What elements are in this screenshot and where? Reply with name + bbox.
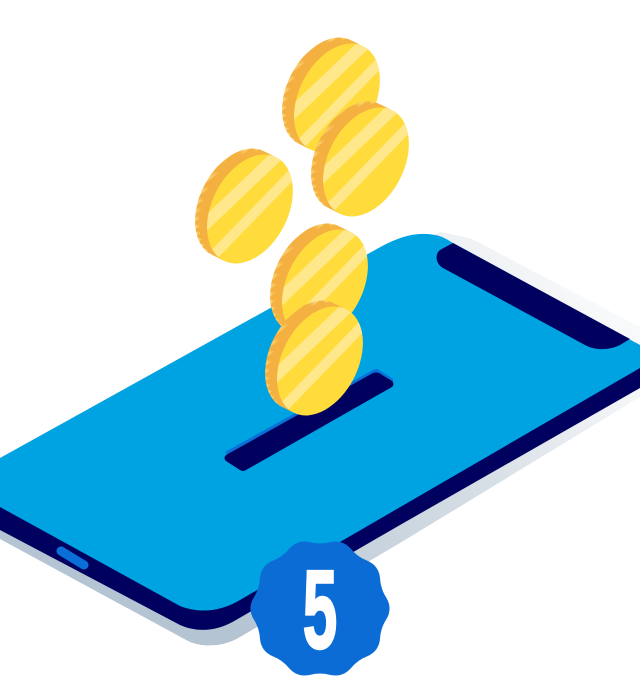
coin: left — [178, 134, 310, 278]
coin: top — [265, 23, 397, 167]
slot highlight — [225, 369, 393, 465]
phone screen — [0, 234, 640, 611]
phone home button — [61, 551, 84, 565]
coin: upper right — [294, 87, 426, 231]
phone — [0, 232, 640, 645]
phone body edge — [0, 360, 640, 630]
phone bezel shadow — [0, 232, 640, 645]
badge number: 5 — [303, 549, 337, 673]
coin: middle — [253, 209, 385, 353]
phone notch — [437, 243, 630, 349]
step badge — [250, 541, 390, 676]
coin: lowest — [248, 286, 380, 430]
slot opening — [224, 372, 394, 471]
coin slot — [224, 369, 394, 471]
badge shape — [250, 541, 390, 676]
